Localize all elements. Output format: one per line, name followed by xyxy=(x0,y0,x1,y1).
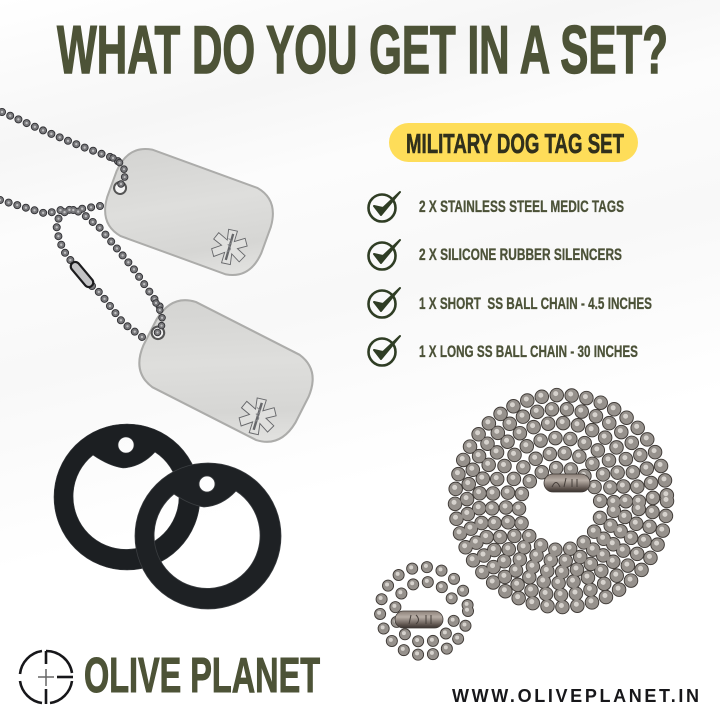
item 4 xyxy=(368,336,638,366)
tag hole xyxy=(150,324,166,341)
short ball chain xyxy=(379,566,468,655)
chain connector xyxy=(69,260,95,289)
logo wordmark: OLIVE PLANET xyxy=(84,649,320,703)
long ball chain xyxy=(454,394,667,607)
dog tag 2 xyxy=(128,290,324,452)
icon: medical star xyxy=(209,227,250,267)
chain links through tag holes xyxy=(113,158,162,333)
dog tag 1 xyxy=(96,141,282,283)
chain connector xyxy=(544,474,590,492)
item 1 xyxy=(368,192,624,222)
item 3 xyxy=(368,288,652,318)
logo icon: crosshair xyxy=(20,651,73,704)
item 2: 2 X SILICONE RUBBER SILENCERS xyxy=(419,246,622,264)
silicone silencer 2 xyxy=(135,463,281,609)
item 1: 2 X STAINLESS STEEL MEDIC TAGS xyxy=(419,198,624,216)
tag hole xyxy=(112,180,128,196)
icon: medical star xyxy=(236,395,279,438)
chain connector xyxy=(395,611,443,628)
item 2 xyxy=(368,240,622,270)
silicone silencer 1 xyxy=(54,424,200,570)
chain centre opening xyxy=(546,497,586,526)
set heading pill xyxy=(389,123,638,162)
checklist xyxy=(368,192,652,366)
item 4: 1 X LONG SS BALL CHAIN - 30 INCHES xyxy=(419,343,638,361)
chains of dog tags xyxy=(0,112,163,337)
website: WWW.OLIVEPLANET.IN xyxy=(452,686,699,706)
